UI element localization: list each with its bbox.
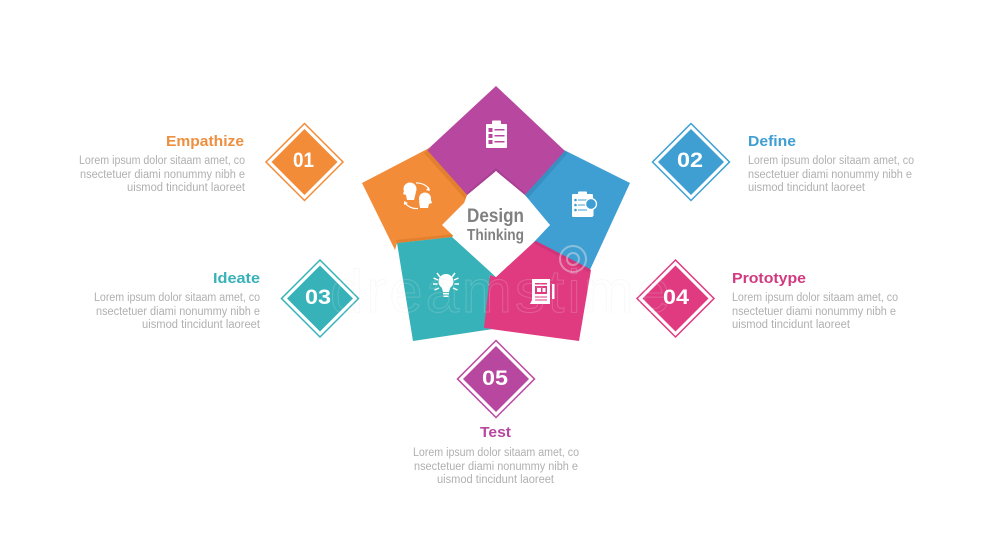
text block: Ideate: nsectetuer diami nonummy nibh e [96, 306, 260, 318]
text block: Ideate: Ideate [213, 270, 260, 287]
text block: Define: Define [748, 133, 796, 150]
center title: Design [467, 206, 524, 227]
watermark: dreamstime [330, 258, 670, 325]
badge 03: 03 [305, 286, 331, 309]
text block: Define: nsectetuer diami nonummy nibh e [748, 169, 912, 181]
segment: purple [427, 86, 565, 195]
icon: light bulb [433, 273, 459, 297]
center title: Thinking [467, 227, 524, 244]
badge 01 [266, 124, 343, 200]
center diamond [442, 171, 550, 277]
badge 01: 01 [293, 149, 314, 172]
icon: clipboard with magnifier [572, 192, 596, 217]
badge 04: 04 [663, 286, 689, 309]
text block: Test: nsectetuer diami nonummy nibh e [414, 461, 578, 473]
shadow edges [396, 146, 590, 272]
badge 02: 02 [677, 149, 703, 172]
segment: pink [483, 243, 591, 341]
text block: Empathize: Lorem ipsum dolor sitaam amet, co [79, 155, 245, 167]
badge 04 [637, 260, 714, 337]
text block: Define: uismod tincidunt laoreet [748, 182, 866, 194]
text block: Test: Test [480, 424, 511, 441]
center title [467, 206, 524, 244]
text block: Define [748, 133, 914, 194]
text block: Test: uismod tincidunt laoreet [437, 474, 555, 486]
segment: blue [525, 148, 630, 272]
pentagon diagram [362, 86, 630, 341]
text block: Define: Lorem ipsum dolor sitaam amet, co [748, 155, 914, 167]
text block: Empathize [79, 133, 246, 194]
text block: Empathize: Empathize [166, 133, 244, 150]
icon: clipboard checklist [486, 120, 507, 148]
text block: Prototype [732, 270, 898, 331]
badge 03 [282, 260, 358, 337]
text block: Test [413, 424, 579, 486]
text block: Prototype: nsectetuer diami nonummy nibh e [732, 306, 896, 318]
icon: blueprint [530, 279, 554, 304]
segment: teal [397, 237, 496, 341]
text block: Ideate [94, 270, 261, 331]
text block: Prototype: uismod tincidunt laoreet [732, 319, 851, 331]
text block: Empathize: uismod tincidunt laoreet [127, 182, 246, 194]
text block: Prototype: Prototype [732, 270, 806, 287]
badge 02 [652, 124, 730, 200]
badge 05 [458, 340, 534, 418]
segment: orange [362, 146, 467, 250]
text block: Ideate: Lorem ipsum dolor sitaam amet, co [94, 292, 260, 304]
icon: two heads with arrows [403, 182, 432, 209]
text block: Ideate: uismod tincidunt laoreet [142, 319, 261, 331]
badge 05: 05 [482, 367, 508, 390]
text block: Prototype: Lorem ipsum dolor sitaam amet, co [732, 292, 898, 304]
text block: Test: Lorem ipsum dolor sitaam amet, co [413, 447, 579, 459]
text block: Empathize: nsectetuer diami nonummy nibh e [80, 169, 245, 181]
